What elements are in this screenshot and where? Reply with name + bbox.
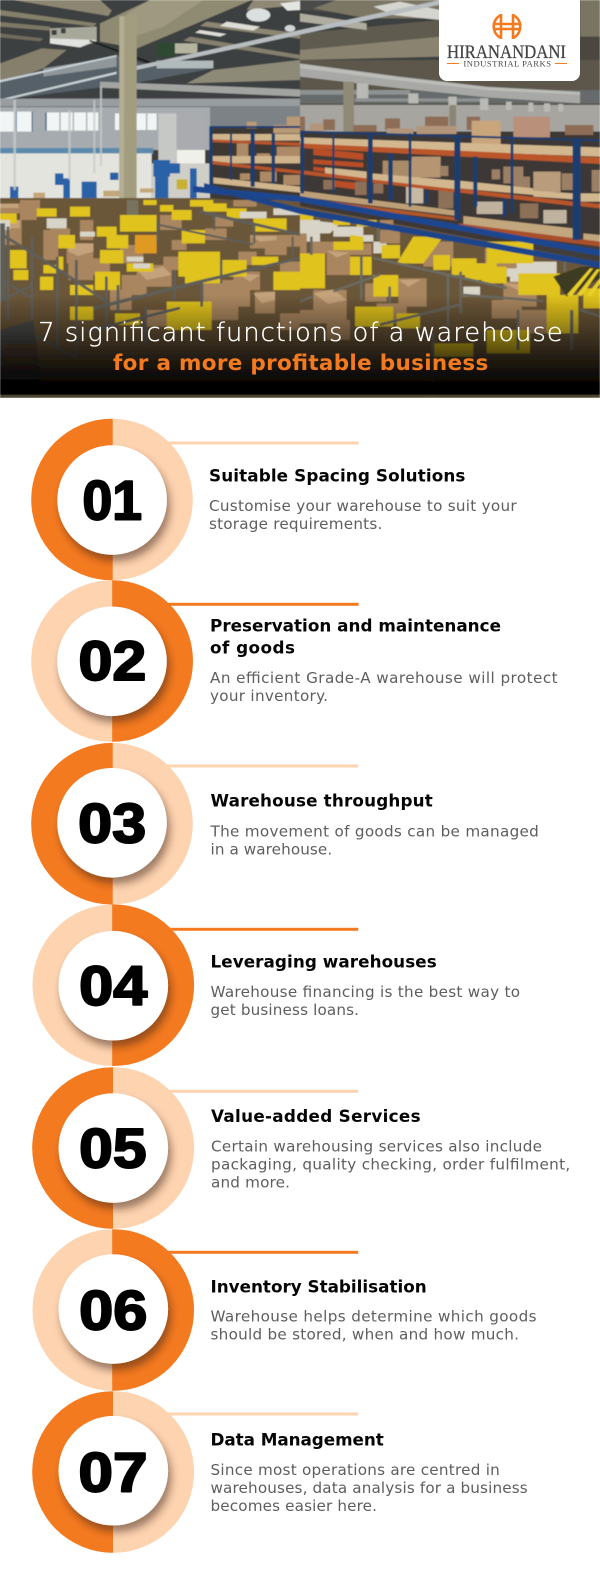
subtitle: for a more profitable business — [113, 351, 488, 376]
text 01: Customise your warehouse to suit your — [209, 497, 517, 515]
text 03: in a warehouse. — [210, 840, 332, 858]
heading 02: of goods — [210, 638, 295, 658]
text 01 — [209, 497, 517, 533]
text 04: get business loans. — [210, 1001, 359, 1019]
text 04: Warehouse financing is the best way to — [210, 983, 520, 1001]
step 05 — [32, 1067, 570, 1229]
heading 04: Leveraging warehouses — [210, 952, 437, 972]
text 01: storage requirements. — [209, 515, 382, 533]
step 03 — [31, 743, 539, 904]
text 07: becomes easier here. — [210, 1497, 377, 1515]
text 05: Certain warehousing services also include — [211, 1138, 542, 1156]
heading 03: Warehouse throughput — [210, 791, 433, 811]
number 04: 04 — [79, 954, 147, 1017]
number 06: 06 — [79, 1279, 147, 1342]
text 05: and more. — [211, 1174, 290, 1192]
warehouse photo — [0, 0, 600, 398]
number 01: 01 — [82, 468, 142, 532]
brand name: HIRANANDANI — [447, 43, 566, 63]
heading 02 — [210, 616, 501, 658]
icon: logo emblem — [494, 14, 520, 39]
text 06 — [210, 1308, 537, 1344]
heading 07: Data Management — [210, 1429, 384, 1449]
text 05: packaging, quality checking, order fulfilment, — [211, 1156, 570, 1174]
heading 02: Preservation and maintenance — [210, 616, 501, 636]
text 07 — [210, 1461, 528, 1515]
text 03: The movement of goods can be managed — [210, 822, 539, 840]
text 04 — [210, 983, 520, 1019]
step 02 — [31, 580, 558, 742]
logo card — [439, 0, 580, 81]
heading 05: Value-added Services — [211, 1106, 421, 1126]
number 05: 05 — [79, 1117, 147, 1180]
text 07: warehouses, data analysis for a business — [210, 1479, 528, 1497]
number 07: 07 — [78, 1440, 148, 1503]
step 04 — [32, 904, 520, 1066]
text 03 — [210, 822, 539, 858]
text 06: Warehouse helps determine which goods — [210, 1308, 537, 1326]
heading 01: Suitable Spacing Solutions — [209, 466, 465, 486]
title: 7 significant functions of a warehouse — [38, 318, 563, 348]
title — [38, 318, 563, 376]
text 02: An efficient Grade-A warehouse will protect — [210, 669, 558, 687]
text 07: Since most operations are centred in — [210, 1461, 500, 1479]
step 01 — [31, 419, 517, 580]
step 07 — [32, 1391, 528, 1553]
brand tagline: INDUSTRIAL PARKS — [463, 58, 551, 68]
panel: warehouse photo header — [0, 0, 600, 398]
text 06: should be stored, when and how much. — [210, 1326, 519, 1344]
step 06 — [32, 1229, 537, 1391]
text 05 — [211, 1138, 570, 1192]
number 02: 02 — [78, 629, 146, 692]
heading 06: Inventory Stabilisation — [210, 1276, 427, 1296]
text 02: your inventory. — [210, 687, 328, 705]
text 02 — [210, 669, 558, 705]
number 03: 03 — [78, 792, 146, 855]
